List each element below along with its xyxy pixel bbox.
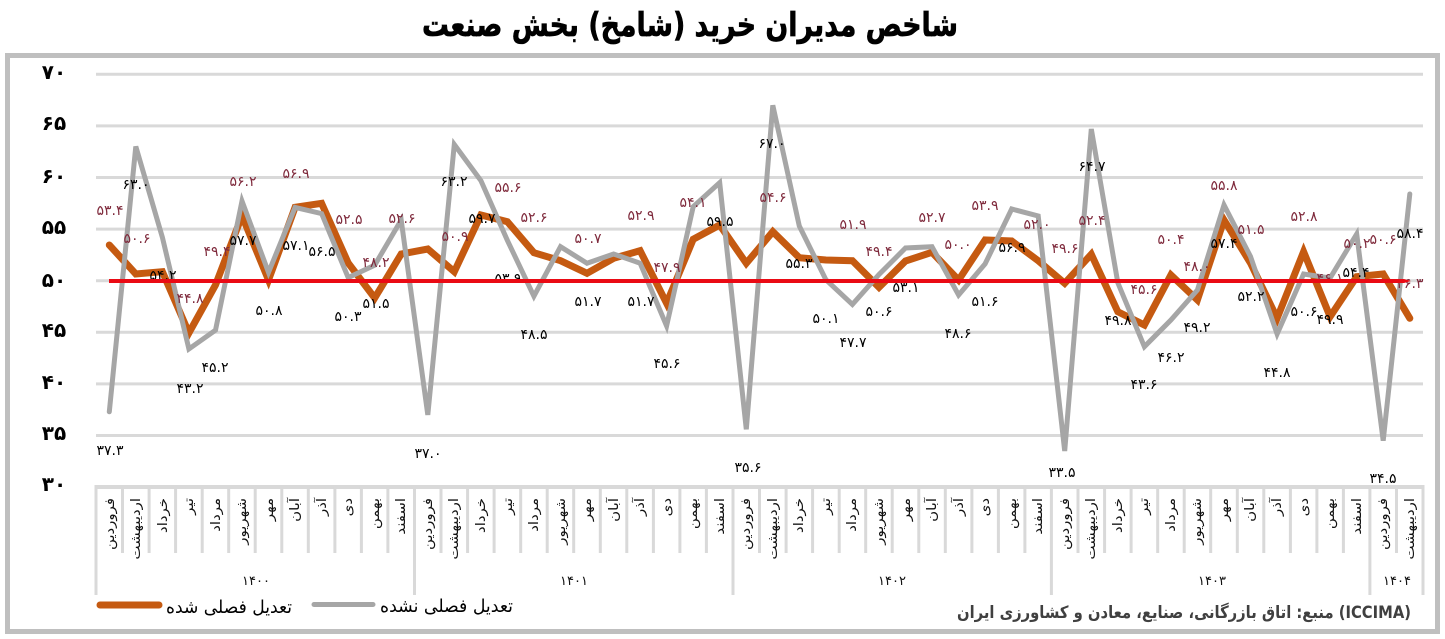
month axis labels: آبان (287, 497, 303, 522)
data labels: not seasonally adjusted: ۶۷.۰ (758, 136, 786, 152)
data labels: seasonally adjusted: ۵۰.۹ (441, 229, 469, 245)
data labels: seasonally adjusted: ۵۶.۹ (282, 166, 310, 182)
y axis labels: ۵۵ (42, 215, 66, 239)
data labels: not seasonally adjusted: ۵۴.۲ (149, 268, 177, 284)
data labels: not seasonally adjusted: ۵۱.۶ (971, 294, 999, 310)
data labels: not seasonally adjusted: ۴۹.۹ (1316, 312, 1344, 328)
data labels: seasonally adjusted: ۵۰.۰ (944, 237, 972, 253)
data labels: seasonally adjusted: ۴۸.۰ (1183, 259, 1211, 275)
data labels: not seasonally adjusted: ۵۹.۷ (468, 211, 496, 227)
data labels: seasonally adjusted: ۴۹.۴ (865, 244, 893, 260)
month axis labels: مهر (262, 498, 277, 522)
data labels: not seasonally adjusted: ۵۲.۲ (1237, 289, 1265, 305)
month axis labels: خرداد (792, 498, 807, 533)
month axis labels: خرداد (156, 498, 171, 533)
month axis labels: آذر (632, 497, 648, 517)
data labels: not seasonally adjusted: ۵۹.۵ (706, 214, 734, 230)
data labels: not seasonally adjusted: ۵۰.۳ (334, 309, 362, 325)
y axis labels: ۷۰ (42, 60, 66, 84)
data labels: not seasonally adjusted: ۴۷.۷ (839, 335, 867, 351)
data labels: seasonally adjusted: ۵۴.۱ (679, 195, 707, 211)
data labels: seasonally adjusted: ۵۲.۶ (520, 210, 548, 226)
data labels: not seasonally adjusted: ۴۳.۲ (176, 381, 204, 397)
data labels: not seasonally adjusted: ۴۹.۲ (1183, 320, 1211, 336)
month axis labels: دی (1297, 498, 1312, 516)
data labels: seasonally adjusted: ۵۲.۶ (388, 211, 416, 227)
data labels: not seasonally adjusted: ۵۶.۹ (998, 240, 1026, 256)
month axis labels: بهمن (686, 498, 701, 529)
data labels: not seasonally adjusted: ۵۸.۴ (1396, 226, 1424, 242)
data labels: not seasonally adjusted: ۴۳.۶ (1130, 377, 1158, 393)
data labels: seasonally adjusted: ۵۰.۷ (574, 231, 602, 247)
month axis labels: مهر (1217, 498, 1232, 522)
year axis labels: ۱۴۰۳ (1198, 574, 1226, 589)
month axis labels: اسفند (1031, 498, 1046, 535)
month axis labels: آبان (1242, 497, 1258, 522)
data labels: seasonally adjusted: ۴۶.۱ (1316, 271, 1344, 287)
month axis labels: اردیبهشت (447, 498, 462, 560)
data labels: seasonally adjusted: ۴۵.۶ (1130, 282, 1158, 298)
year axis labels: ۱۴۰۴ (1383, 574, 1411, 589)
month axis labels: اسفند (394, 498, 409, 535)
month axis labels: مرداد (209, 498, 224, 532)
year axis labels: ۱۴۰۱ (560, 574, 588, 589)
month axis labels: بهمن (1323, 498, 1338, 529)
reference line at 50 (109, 279, 1411, 283)
month axis labels: آبان (924, 497, 940, 522)
data labels: not seasonally adjusted: ۴۵.۶ (653, 356, 681, 372)
month axis labels: فروردین (103, 498, 118, 550)
data labels: not seasonally adjusted: ۵۱.۷ (574, 294, 602, 310)
data labels: seasonally adjusted: ۴۴.۸ (176, 291, 204, 307)
data labels: not seasonally adjusted: ۵۰.۱ (812, 311, 840, 327)
data labels: not seasonally adjusted: ۴۹.۸ (1104, 313, 1132, 329)
data labels: not seasonally adjusted: ۵۰.۶ (865, 304, 893, 320)
data labels: seasonally adjusted: ۵۱.۵ (1237, 222, 1265, 238)
month axis labels: مرداد (1164, 498, 1179, 532)
month axis labels: دی (341, 498, 356, 516)
data labels: seasonally adjusted: ۵۲.۹ (627, 208, 655, 224)
data labels: not seasonally adjusted: ۵۷.۱ (282, 238, 310, 254)
data labels: seasonally adjusted: ۵۲.۰ (1023, 217, 1051, 233)
month axis labels: آذر (951, 497, 967, 517)
data labels: not seasonally adjusted: ۶۴.۷ (1078, 159, 1106, 175)
data labels: seasonally adjusted: ۵۵.۸ (1210, 178, 1238, 194)
data labels: not seasonally adjusted: ۵۴.۴ (1342, 265, 1370, 281)
month axis labels: فروردین (421, 498, 436, 550)
month axis labels: تیر (1137, 498, 1152, 516)
data labels: not seasonally adjusted: ۵۱.۵ (362, 296, 390, 312)
month axis labels: دی (660, 498, 675, 516)
data labels: not seasonally adjusted: ۴۶.۲ (1157, 350, 1185, 366)
month axis labels: اردیبهشت (1084, 498, 1099, 560)
data labels: seasonally adjusted: ۵۲.۴ (1078, 213, 1106, 229)
data labels: seasonally adjusted: ۵۱.۹ (839, 217, 867, 233)
data labels: not seasonally adjusted: ۴۵.۲ (201, 360, 229, 376)
month axis labels: مرداد (845, 498, 860, 532)
data labels: not seasonally adjusted: ۶۳.۰ (122, 177, 150, 193)
data labels: not seasonally adjusted: ۳۷.۳ (96, 443, 124, 459)
data labels: not seasonally adjusted: ۵۳.۹ (494, 271, 522, 287)
data labels: seasonally adjusted: ۴۸.۲ (362, 255, 390, 271)
data labels: not seasonally adjusted: ۵۰.۶ (1290, 304, 1318, 320)
line: not seasonally adjusted series (109, 105, 1410, 451)
month axis labels: آذر (1269, 497, 1285, 517)
data labels: not seasonally adjusted: ۵۰.۸ (255, 303, 283, 319)
data labels: not seasonally adjusted (96, 136, 1424, 487)
y axis labels (42, 60, 66, 496)
data labels: seasonally adjusted (96, 166, 1424, 307)
source note: منبع: اتاق بازرگانی، صنایع، معادن و کشاورزی ایران (ICCIMA) (957, 602, 1411, 623)
year axis labels (242, 574, 1411, 589)
year axis labels: ۱۴۰۲ (878, 574, 906, 589)
data labels: seasonally adjusted: ۵۲.۸ (1290, 209, 1318, 225)
month axis labels: فروردین (739, 498, 754, 550)
month axis labels: تیر (501, 498, 516, 516)
month axis labels: تیر (819, 498, 834, 516)
data labels: not seasonally adjusted: ۶۳.۲ (440, 174, 468, 190)
data labels: seasonally adjusted: ۵۰.۶ (123, 231, 151, 247)
line: seasonally adjusted series (109, 203, 1410, 333)
title: شاخص مدیران خرید (شامخ) بخش صنعت (422, 5, 958, 45)
data labels: seasonally adjusted: ۵۰.۲ (1343, 236, 1371, 252)
month axis labels: دی (978, 498, 993, 516)
data labels: seasonally adjusted: ۵۰.۶ (1369, 232, 1397, 248)
month axis labels: خرداد (474, 498, 489, 533)
month axis labels: اردیبهشت (129, 498, 144, 560)
month axis labels: بهمن (1005, 498, 1020, 529)
data labels: seasonally adjusted: ۵۰.۴ (1157, 232, 1185, 248)
y axis labels: ۴۰ (42, 370, 66, 394)
month axis labels: مهر (899, 498, 914, 522)
data labels: not seasonally adjusted: ۵۷.۷ (229, 233, 257, 249)
y axis labels: ۶۵ (42, 111, 66, 135)
data labels: seasonally adjusted: ۵۳.۴ (96, 203, 124, 219)
data labels: seasonally adjusted: ۵۲.۵ (335, 212, 363, 228)
month axis labels: اردیبهشت (1403, 498, 1418, 560)
data labels: seasonally adjusted: ۵۵.۶ (494, 180, 522, 196)
month axis labels: شهریور (1190, 498, 1205, 546)
month axis labels: اسفند (1350, 498, 1365, 535)
data labels: not seasonally adjusted: ۵۱.۷ (627, 294, 655, 310)
y axis labels: ۳۰ (42, 472, 66, 496)
data labels: seasonally adjusted: ۴۹.۶ (1051, 241, 1079, 257)
month axis labels: اسفند (713, 498, 728, 535)
month axis labels: آذر (314, 497, 330, 517)
data labels: not seasonally adjusted: ۳۴.۵ (1369, 471, 1397, 487)
month axis labels (103, 497, 1418, 560)
data labels: not seasonally adjusted: ۵۵.۳ (785, 256, 813, 272)
month axis labels: اردیبهشت (766, 498, 781, 560)
month axis labels: مهر (580, 498, 595, 522)
data labels: not seasonally adjusted: ۵۷.۴ (1210, 236, 1238, 252)
data labels: not seasonally adjusted: ۳۵.۶ (734, 460, 762, 476)
data labels: seasonally adjusted: ۴۷.۹ (653, 260, 681, 276)
y axis labels: ۳۵ (42, 421, 66, 445)
data labels: seasonally adjusted: ۴۹.۴ (203, 244, 231, 260)
month axis labels: شهریور (235, 498, 250, 546)
legend: seasonally adjusted: تعدیل فصلی شده (166, 597, 292, 618)
data labels: not seasonally adjusted: ۵۳.۱ (892, 280, 920, 296)
y axis labels: ۵۰ (42, 268, 66, 292)
data labels: not seasonally adjusted: ۴۸.۵ (520, 327, 548, 343)
data labels: not seasonally adjusted: ۵۶.۵ (308, 244, 336, 260)
month axis labels: تیر (182, 498, 197, 516)
data labels: not seasonally adjusted: ۴۴.۸ (1263, 365, 1291, 381)
month axis labels: مرداد (527, 498, 542, 532)
data labels: seasonally adjusted: ۵۴.۶ (759, 190, 787, 206)
data labels: seasonally adjusted: ۵۶.۲ (229, 174, 257, 190)
y axis labels: ۶۰ (42, 164, 66, 188)
data labels: seasonally adjusted: ۴۶.۳ (1396, 276, 1424, 292)
month axis labels: بهمن (368, 498, 383, 529)
data labels: not seasonally adjusted: ۳۷.۰ (414, 446, 442, 462)
year axis labels: ۱۴۰۰ (242, 574, 270, 589)
legend: not seasonally adjusted: تعدیل فصلی نشده (380, 596, 513, 617)
data labels: not seasonally adjusted: ۴۸.۶ (944, 326, 972, 342)
y axis labels: ۴۵ (42, 318, 66, 342)
data labels: seasonally adjusted: ۵۲.۷ (918, 210, 946, 226)
month axis labels: فروردین (1058, 498, 1073, 550)
data labels: not seasonally adjusted: ۳۳.۵ (1048, 465, 1076, 481)
month axis labels: خرداد (1111, 498, 1126, 533)
month axis labels: آبان (606, 497, 622, 522)
month axis labels: شهریور (872, 498, 887, 546)
data labels: seasonally adjusted: ۵۳.۹ (971, 198, 999, 214)
month axis labels: شهریور (554, 498, 569, 546)
month axis labels: فروردین (1376, 498, 1391, 550)
